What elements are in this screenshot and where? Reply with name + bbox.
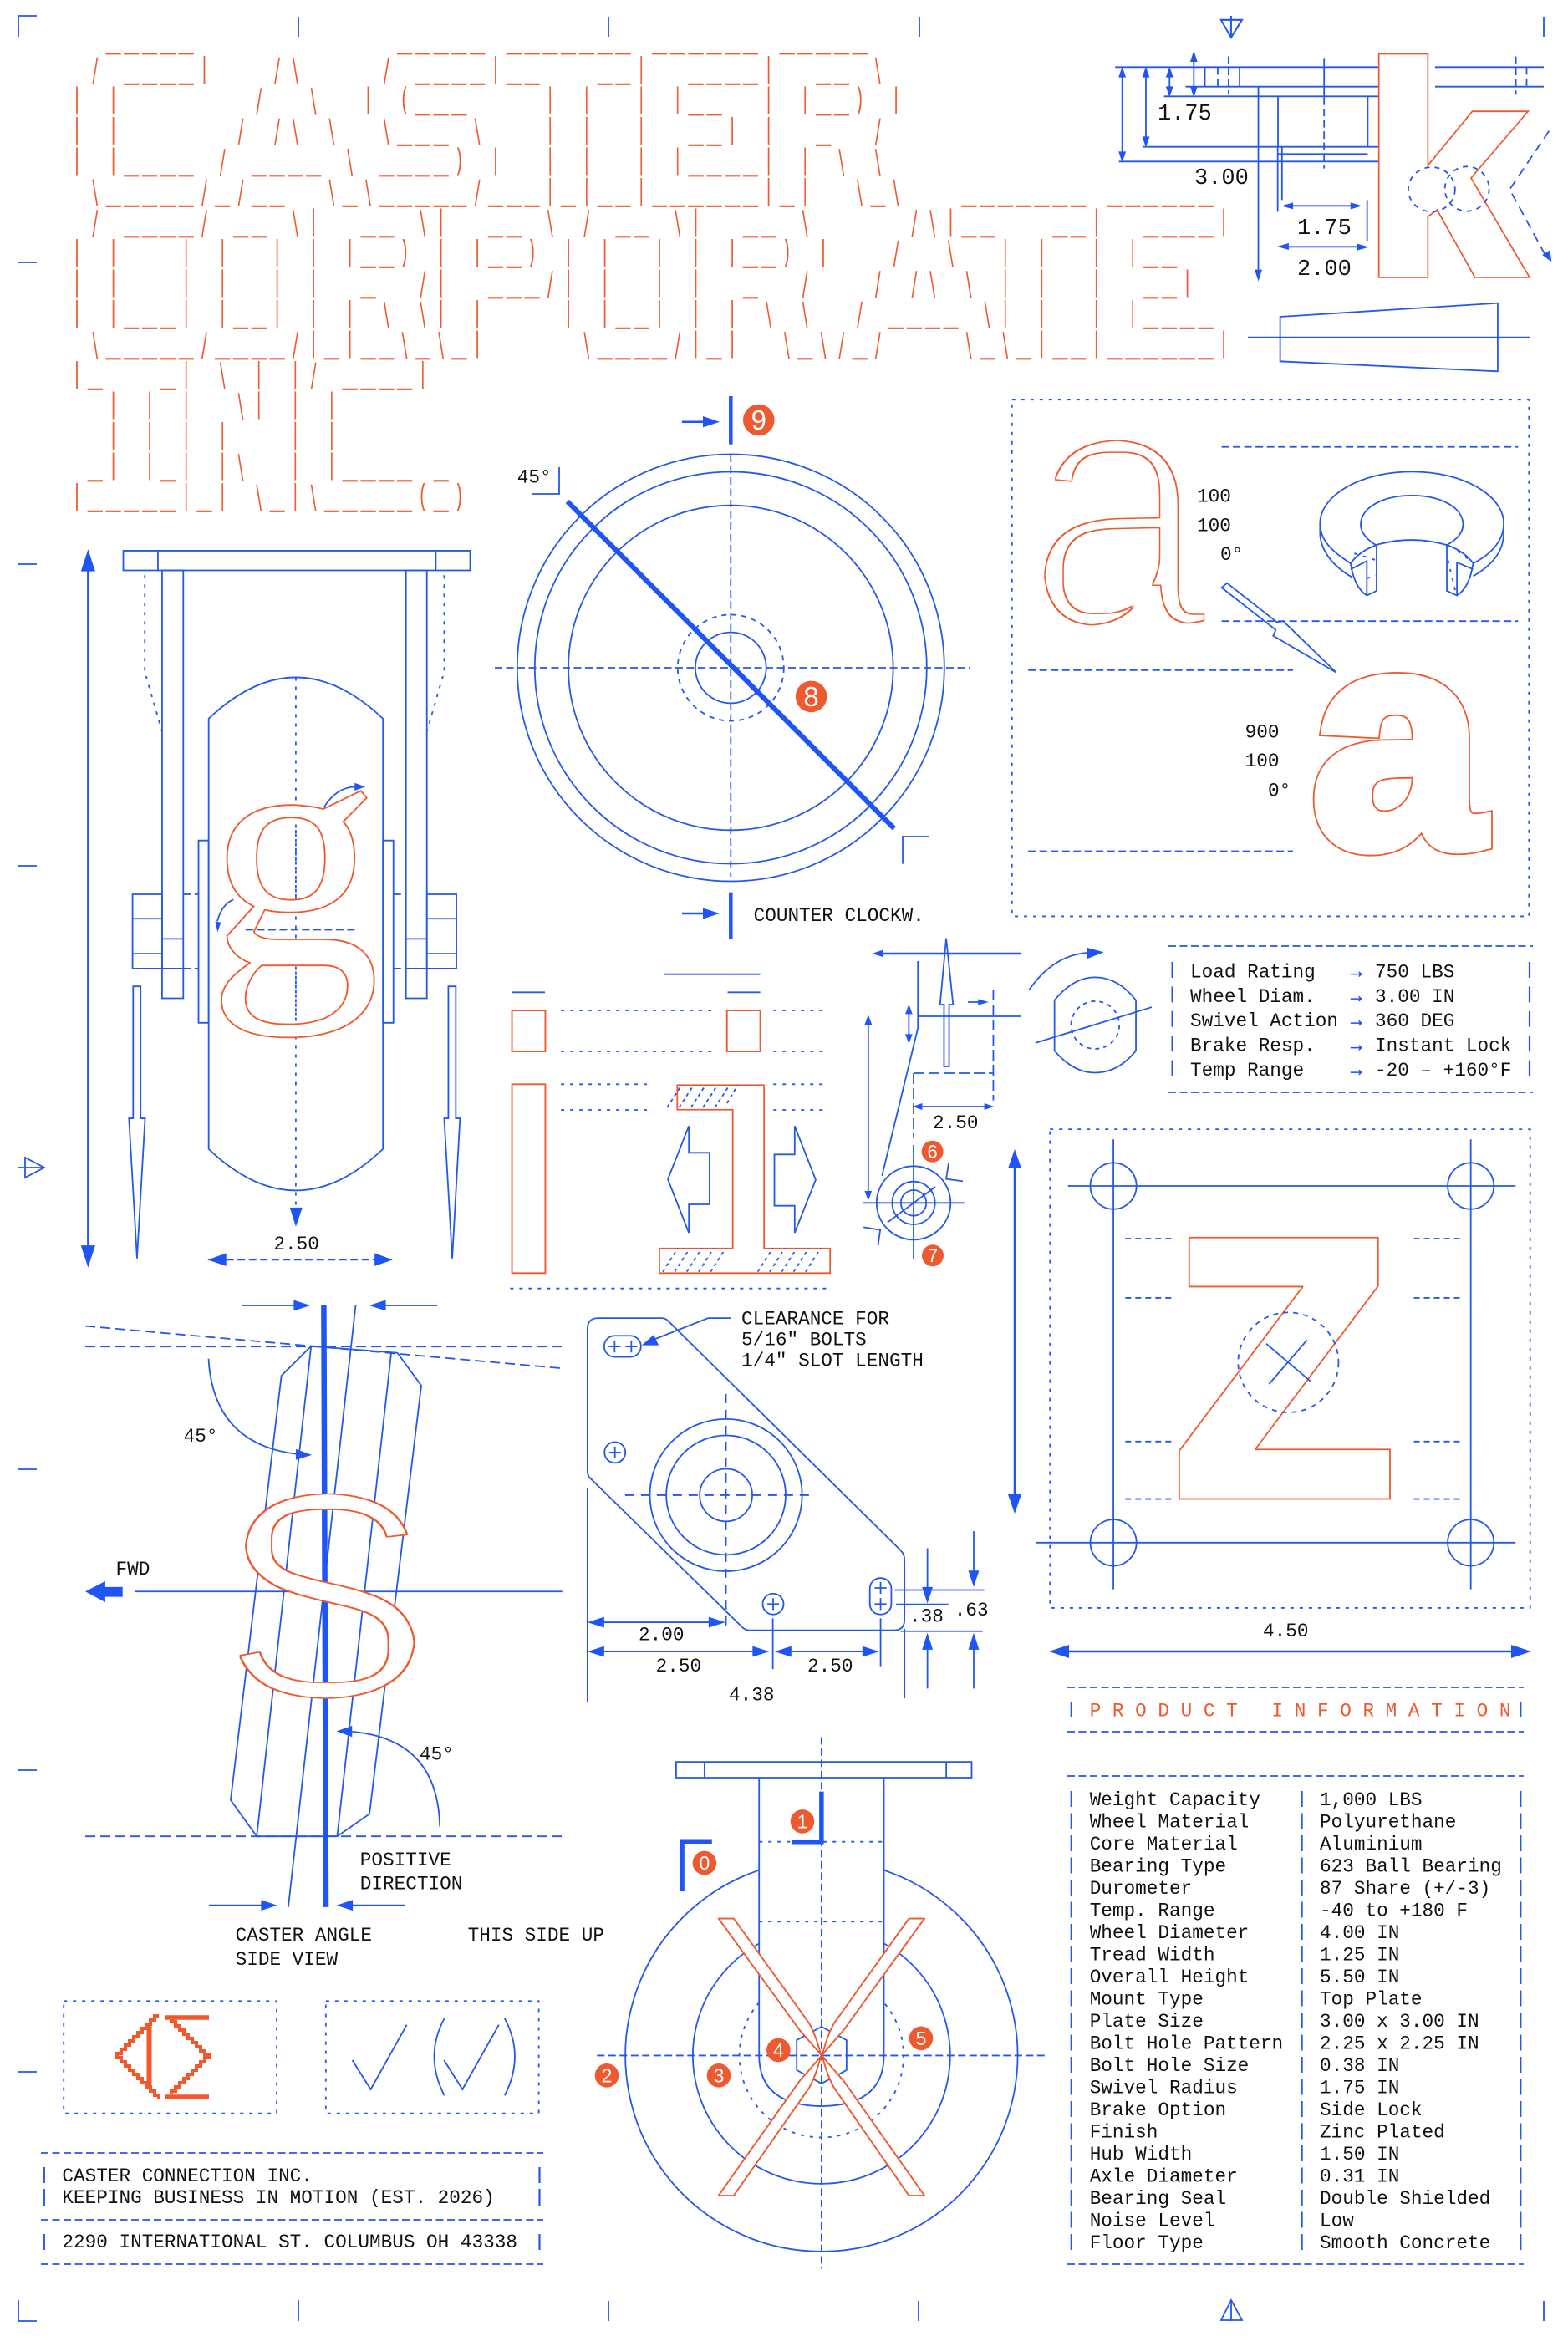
callout 9: 9 — [751, 405, 766, 435]
bold axis values: 0° — [1268, 781, 1291, 802]
title: CASTER CORPORATE INC. as ASCII art: ___ __ _ — [69, 123, 834, 150]
panel: letter a weights — [1012, 303, 1529, 916]
summary rows: Temp Range — [1190, 1060, 1304, 1081]
title: CASTER CORPORATE INC. as ASCII art: | | | | | | | ) | | ) | | | | | ) | | | | | — [73, 237, 1147, 269]
table values: 1.75 IN — [1320, 2078, 1399, 2099]
table values: 5.50 IN — [1320, 1967, 1399, 1988]
table labels: Finish — [1090, 2121, 1158, 2143]
z letterform: z — [1159, 1051, 1408, 1604]
table values: Polyurethane — [1320, 1812, 1456, 1834]
table labels: Bearing Seal — [1090, 2188, 1226, 2210]
callout 7: 7 — [928, 1245, 938, 1266]
summary rows: → — [1351, 1060, 1362, 1081]
panel: product information header — [1067, 1687, 1524, 1732]
title: CASTER CORPORATE INC. as ASCII art: / \ \ \ — [74, 146, 893, 186]
a bold: a — [1312, 568, 1484, 910]
title: CASTER CORPORATE INC. as ASCII art — [69, 32, 1238, 522]
title: CASTER CORPORATE INC. as ASCII art: ___ __ __ ____ ____ — [69, 306, 1217, 333]
title: CASTER CORPORATE INC. as ASCII art: | | | | | | — [73, 420, 346, 452]
title: CASTER CORPORATE INC. as ASCII art: | | ) | | | | | | | — [73, 145, 819, 177]
table labels: Bearing Type — [1090, 1855, 1226, 1877]
label: 45 degrees: 45° — [517, 466, 552, 488]
plate dimensions: 2.50 — [807, 1656, 853, 1677]
label: 2.50: 2.50 — [933, 1112, 978, 1134]
callouts 0 to 5: 2 — [602, 2064, 612, 2086]
panel: wheel assembly with cross — [595, 1737, 1047, 2268]
title: CASTER CORPORATE INC. as ASCII art: _____ ____ _ __ _ _ ____ _ _ _ _ _ __ ______ — [69, 337, 1217, 364]
table values: Smooth Concrete — [1320, 2232, 1490, 2254]
panel: stem i — [510, 974, 848, 1380]
table labels: Wheel Diameter — [1090, 1922, 1249, 1944]
title: CASTER CORPORATE INC. as ASCII art: | | | | | | | | | | | | | | | | | | — [73, 298, 1147, 330]
light axis values — [1197, 486, 1243, 566]
title: CASTER CORPORATE INC. as ASCII art: \ — [74, 452, 256, 491]
bold axis values: 900 — [1245, 722, 1279, 744]
label: counter clockwise: COUNTER CLOCKW. — [754, 905, 924, 927]
title: CASTER CORPORATE INC. as ASCII art: | | | | — [73, 53, 783, 86]
title: CASTER CORPORATE INC. as ASCII art: \ \ \ \ / \ — [74, 299, 1002, 338]
table labels: Swivel Radius — [1090, 2078, 1238, 2099]
company name and tagline: CASTER CONNECTION INC. — [62, 2165, 313, 2187]
callout 6 — [922, 1141, 944, 1163]
title: CASTER CORPORATE INC. as ASCII art: _____ _____ _______ ______ _____ — [69, 32, 871, 59]
icon: logo mark — [117, 2016, 209, 2099]
title: CASTER CORPORATE INC. as ASCII art: __ __ __ __ — [69, 245, 1180, 272]
angle and direction labels: DIRECTION — [360, 1873, 462, 1895]
title: CASTER CORPORATE INC. as ASCII art: _ ___ _ __ — [69, 276, 1180, 303]
title: CASTER CORPORATE INC. as ASCII art: \ — [74, 391, 256, 430]
title: CASTER CORPORATE INC. as ASCII art: ____ ____ __ __ ____ __ — [69, 62, 853, 89]
panel: swivel side view — [863, 939, 1152, 1266]
callout: bolt clearance: 1/4" SLOT LENGTH — [741, 1351, 924, 1372]
s letterform: s — [219, 1344, 435, 1784]
plate dimensions: 4.38 — [729, 1685, 774, 1707]
table labels: Plate Size — [1090, 2011, 1204, 2033]
panel: wheel front circles — [495, 396, 970, 939]
table labels: Floor Type — [1090, 2232, 1204, 2254]
dimension labels: 1.75 — [1158, 102, 1212, 127]
table values: Top Plate — [1320, 1989, 1423, 2011]
table values: 2.25 x 2.25 IN — [1320, 2033, 1479, 2054]
panel: company address — [41, 2153, 543, 2264]
table values: 4.00 IN — [1320, 1922, 1399, 1944]
summary rows: → — [1351, 986, 1362, 1008]
table values: Low — [1320, 2210, 1354, 2231]
title: CASTER CORPORATE INC. as ASCII art: \ \ — [74, 482, 328, 522]
g letterform: g — [206, 663, 381, 1039]
title: CASTER CORPORATE INC. as ASCII art: _ _ ____ _ — [69, 459, 452, 486]
table labels — [1090, 1789, 1283, 2254]
table values: Double Shielded — [1320, 2188, 1490, 2210]
panel: k bracket dimensions — [1115, 8, 1551, 371]
label: 2.50: 2.50 — [273, 1234, 319, 1255]
table labels: Bolt Hole Size — [1090, 2055, 1249, 2077]
table values: Side Lock — [1320, 2099, 1423, 2121]
title: CASTER CORPORATE INC. as ASCII art: / / \ \ \ / \ \ /\ — [74, 208, 948, 247]
arrow: plate width — [1049, 1645, 1531, 1658]
table labels: Hub Width — [1090, 2144, 1192, 2165]
table values — [1320, 1789, 1502, 2254]
plate dimensions: 2.00 — [639, 1625, 684, 1646]
angle and direction labels: FWD — [115, 1559, 150, 1580]
table labels: Durometer — [1090, 1878, 1192, 1900]
title: CASTER CORPORATE INC. as ASCII art: _ _ ____ — [69, 367, 415, 394]
callout 8: 8 — [803, 681, 819, 712]
panel: mounting plate — [588, 1309, 989, 1707]
panel: front view with g — [81, 549, 470, 1268]
table values: -40 to +180 F — [1320, 1901, 1468, 1922]
title: CASTER CORPORATE INC. as ASCII art: | | | | | — [73, 359, 437, 391]
bold axis values — [1245, 722, 1291, 802]
title: CASTER CORPORATE INC. as ASCII art: / /\ \ \ \ / — [74, 116, 893, 155]
table values: 1.50 IN — [1320, 2144, 1399, 2165]
callouts 0 to 5: 4 — [773, 2039, 784, 2061]
angle and direction labels: 45° — [420, 1744, 454, 1766]
summary rows: → — [1351, 1036, 1362, 1057]
title: CASTER CORPORATE INC. as ASCII art: / \ — [74, 85, 328, 125]
panel: caster angle side view with s — [85, 1300, 604, 1971]
title: CASTER CORPORATE INC. as ASCII art: ____ __ __ __ __ __ __ __ ____ — [69, 215, 1217, 242]
table labels: Weight Capacity — [1090, 1789, 1260, 1811]
title: CASTER CORPORATE INC. as ASCII art: \ / / \ \ / \ \ — [74, 177, 911, 216]
table labels: Core Material — [1090, 1834, 1238, 1855]
table labels: Noise Level — [1090, 2210, 1214, 2231]
bold axis values: 100 — [1245, 751, 1279, 772]
light axis values: 100 — [1197, 516, 1231, 537]
table labels: Wheel Material — [1090, 1812, 1249, 1834]
plate dimensions: 2.50 — [656, 1656, 701, 1677]
table labels: Brake Option — [1090, 2099, 1226, 2121]
table labels: Bolt Hole Pattern — [1090, 2033, 1283, 2054]
summary rows: → — [1351, 961, 1362, 983]
address line: 2290 INTERNATIONAL ST. COLUMBUS OH 43338 — [62, 2231, 517, 2253]
table values: 0.31 IN — [1320, 2166, 1399, 2188]
table labels: Axle Diameter — [1090, 2166, 1238, 2188]
panel: product information table — [1067, 1776, 1524, 2264]
angle and direction labels — [115, 1426, 604, 1971]
title: CASTER CORPORATE INC. as ASCII art: _____ _ __ _ _____ ___ _ __ ______ _ _ _______ ______ — [69, 184, 1217, 211]
plate dimensions — [639, 1600, 989, 1707]
panel: check marks box — [326, 2001, 539, 2114]
light axis values: 100 — [1197, 486, 1231, 508]
arrow: plate height — [1008, 1149, 1021, 1514]
title: CASTER CORPORATE INC. as ASCII art: ____ ____ ____ ____ — [69, 154, 761, 181]
angle and direction labels: THIS SIDE UP — [468, 1925, 604, 1946]
panel: top plate with z — [1008, 1051, 1531, 1658]
dimension labels — [1158, 102, 1352, 282]
callouts 0 to 5 — [595, 1809, 933, 2088]
k letterform: k — [1365, 8, 1521, 334]
callout: bolt clearance: CLEARANCE FOR — [741, 1309, 889, 1331]
summary rows — [1190, 961, 1511, 1081]
summary rows: Instant Lock — [1375, 1036, 1511, 1057]
table values: 1,000 LBS — [1320, 1789, 1423, 1811]
title: CASTER CORPORATE INC. as ASCII art: | | | | | | — [73, 206, 1238, 238]
panel: logo box — [64, 2001, 277, 2114]
a bold: a — [1312, 568, 1484, 910]
panel: cam icon — [1029, 948, 1152, 1072]
summary rows: -20 – +160°F — [1375, 1060, 1511, 1081]
title: CASTER CORPORATE INC. as ASCII art: | | | | | | | | | | | | | | | — [73, 267, 1202, 299]
plate dimensions: .38 — [909, 1606, 944, 1628]
title: CASTER CORPORATE INC. as ASCII art: _____ _ _ _____ _ — [69, 489, 452, 517]
dimension labels: 3.00 — [1194, 166, 1249, 191]
title: CASTER CORPORATE INC. as ASCII art: | | | | | — [73, 176, 819, 208]
company name and tagline: KEEPING BUSINESS IN MOTION (EST. 2026) — [62, 2187, 495, 2209]
callout 7 — [922, 1244, 944, 1266]
title: CASTER CORPORATE INC. as ASCII art: \ / — [74, 360, 328, 399]
title: CASTER CORPORATE INC. as ASCII art: / / / / /\ \ — [74, 269, 984, 308]
callouts 0 to 5: 0 — [700, 1852, 710, 1874]
title: CASTER CORPORATE INC. as ASCII art: | | | | | | | | — [73, 328, 1238, 360]
heading: P R O D U C T I N F O R M A T I O N — [1090, 1700, 1510, 1722]
angle and direction labels: POSITIVE — [360, 1850, 451, 1871]
summary rows: 750 LBS — [1375, 961, 1454, 983]
title: CASTER CORPORATE INC. as ASCII art: | | | | ( ) — [73, 481, 474, 513]
title: CASTER CORPORATE INC. as ASCII art: | | | ( | | | | | | ) | — [73, 84, 910, 116]
callout 8 — [796, 681, 827, 712]
table values: Zinc Plated — [1320, 2121, 1445, 2143]
table values: 1.25 IN — [1320, 1944, 1399, 1966]
callouts 0 to 5: 3 — [714, 2064, 724, 2086]
callout 6: 6 — [927, 1142, 938, 1162]
table values: 87 Share (+/-3) — [1320, 1878, 1490, 1900]
callouts 0 to 5: 5 — [916, 2028, 926, 2049]
k letterform: k — [1365, 8, 1521, 334]
table labels: Overall Height — [1090, 1967, 1249, 1988]
light axis values: 0° — [1220, 544, 1243, 566]
callouts 0 to 5: 1 — [797, 1810, 807, 1832]
table values: Aluminium — [1320, 1834, 1423, 1855]
title: CASTER CORPORATE INC. as ASCII art: / \ — [74, 238, 965, 277]
summary rows: Brake Resp. — [1190, 1036, 1316, 1057]
angle and direction labels: 45° — [184, 1426, 217, 1448]
summary rows: 3.00 IN — [1375, 986, 1454, 1008]
summary rows: → — [1351, 1010, 1362, 1032]
dimension labels: 1.75 — [1297, 216, 1352, 242]
summary rows: 360 DEG — [1375, 1010, 1454, 1032]
title: CASTER CORPORATE INC. as ASCII art: | | | | | | — [73, 450, 346, 482]
title: CASTER CORPORATE INC. as ASCII art: ___ __ __ — [69, 93, 853, 120]
title: CASTER CORPORATE INC. as ASCII art: / /\ / \ — [74, 55, 893, 94]
summary rows: Wheel Diam. — [1190, 986, 1316, 1008]
summary rows: Load Rating — [1190, 961, 1316, 983]
table values: 3.00 x 3.00 IN — [1320, 2011, 1479, 2033]
panel: specification summary — [1168, 946, 1533, 1092]
title: CASTER CORPORATE INC. as ASCII art: | | | | | | | — [73, 114, 783, 147]
table labels: Mount Type — [1090, 1989, 1204, 2011]
table values: 623 Ball Bearing — [1320, 1855, 1502, 1877]
table values: 0.38 IN — [1320, 2055, 1399, 2077]
table labels: Tread Width — [1090, 1944, 1214, 1966]
summary rows: Swivel Action — [1190, 1010, 1338, 1032]
dimension labels: 2.00 — [1297, 257, 1352, 282]
plate dimensions: .63 — [955, 1600, 989, 1621]
angle and direction labels: CASTER ANGLE — [236, 1925, 372, 1946]
table labels: Temp. Range — [1090, 1901, 1214, 1922]
angle and direction labels: SIDE VIEW — [236, 1949, 339, 1971]
label: 4.50: 4.50 — [1263, 1621, 1308, 1642]
callout: bolt clearance: 5/16" BOLTS — [741, 1330, 867, 1351]
a light: a — [1025, 303, 1212, 704]
title: CASTER CORPORATE INC. as ASCII art: \ / / \ \ \ / \ \/ / \ \ — [74, 330, 1021, 369]
company name and tagline — [62, 2165, 495, 2209]
callout 9 — [743, 405, 775, 435]
dotless i letterform: ı — [634, 976, 848, 1380]
title: CASTER CORPORATE INC. as ASCII art: | | | | | | — [73, 389, 346, 421]
callout: bolt clearance — [741, 1309, 924, 1372]
